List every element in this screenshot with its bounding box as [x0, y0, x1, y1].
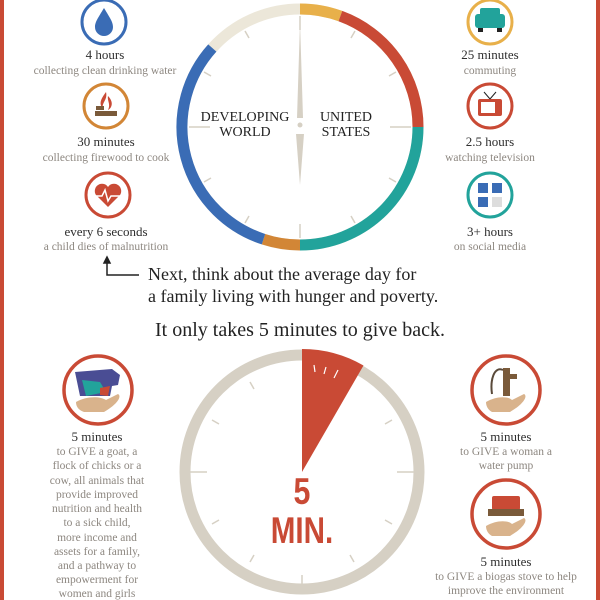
text: biogas stove — [435, 554, 577, 597]
text: goat etc: nutrition and health — [52, 503, 142, 515]
bottom left item — [50, 356, 145, 600]
text: 2.5 hours: watching television — [445, 152, 535, 164]
text: goat etc: cow, all animals that — [50, 475, 145, 487]
text: 25 minutes: 25 minutes — [461, 47, 519, 62]
text: biogas stove: to GIVE a biogas stove to help — [435, 571, 577, 583]
text: 4 hours — [34, 47, 177, 77]
text: next think — [148, 264, 438, 306]
text: 30 minutes: 30 minutes — [77, 134, 135, 149]
text: goat etc: and a pathway to — [58, 560, 136, 572]
bottom clock — [185, 349, 419, 590]
icon: biogas stove — [472, 480, 540, 548]
label developing world: DEVELOPING — [201, 110, 289, 125]
text: water pump — [460, 429, 552, 472]
text: every 6 seconds — [44, 224, 169, 253]
text: 30 minutes — [43, 134, 170, 164]
left items — [34, 0, 177, 253]
clock hand — [296, 22, 304, 185]
top clock — [182, 9, 418, 245]
text: goat etc: assets for a family, — [54, 546, 140, 558]
text: water pump: water pump — [479, 460, 534, 472]
bottom right items — [435, 356, 577, 597]
text: 25 minutes — [461, 47, 519, 77]
text: next think: a family living with hunger and poverty. — [148, 286, 438, 306]
text: 2.5 hours — [445, 134, 535, 164]
text: every 6 seconds: a child dies of malnutrition — [44, 241, 169, 253]
arrow — [104, 257, 139, 275]
text: 25 minutes: commuting — [464, 65, 516, 77]
icon: animals in hand — [64, 356, 132, 424]
icon: water drop — [82, 0, 126, 44]
text: water pump: 5 minutes — [481, 429, 531, 444]
label united states: UNITED — [320, 110, 372, 125]
text: 3+ hours — [454, 224, 526, 253]
text: 4 hours: collecting clean drinking water — [34, 65, 177, 77]
text: every 6 seconds: every 6 seconds — [64, 224, 148, 239]
text: 3+ hours: on social media — [454, 241, 526, 253]
top clock: STATES — [322, 125, 370, 140]
text: goat etc: 5 minutes — [72, 429, 122, 444]
text: goat etc: flock of chicks or a — [53, 460, 141, 472]
text: goat etc: empowerment for — [56, 574, 138, 586]
text: 5 MIN: MIN. — [271, 511, 333, 552]
text: goat etc: to GIVE a goat, a — [57, 446, 137, 458]
text: 4 hours: 4 hours — [86, 47, 124, 62]
icon: water pump — [472, 356, 540, 424]
icon: television — [468, 84, 512, 128]
text: 3+ hours: 3+ hours — [467, 224, 513, 239]
icon: firewood — [84, 84, 128, 128]
text: 30 minutes: collecting firewood to cook — [43, 152, 170, 164]
icon: car — [468, 0, 512, 44]
red wedge — [302, 349, 364, 472]
text: next think: Next, think about the average day for — [148, 264, 416, 284]
text: biogas stove: improve the environment — [448, 585, 565, 597]
text: goat etc: more income and — [57, 532, 137, 544]
text: biogas stove: 5 minutes — [481, 554, 531, 569]
icon: heart — [86, 173, 130, 217]
heading: 5 minutes to give back: It only takes 5 minutes to give back. — [155, 319, 445, 341]
text: goat etc — [50, 429, 145, 600]
text: 5 MIN: 5 — [294, 471, 310, 513]
right items — [445, 0, 535, 253]
icon: social media — [468, 173, 512, 217]
text: 2.5 hours: 2.5 hours — [466, 134, 514, 149]
text: goat etc: to a sick child, — [63, 517, 131, 529]
top clock: WORLD — [219, 125, 271, 140]
text: water pump: to GIVE a woman a — [460, 446, 552, 458]
text: goat etc: provide improved — [56, 489, 138, 501]
text: goat etc: women and girls — [59, 588, 136, 600]
text: 5 MIN — [271, 471, 333, 552]
